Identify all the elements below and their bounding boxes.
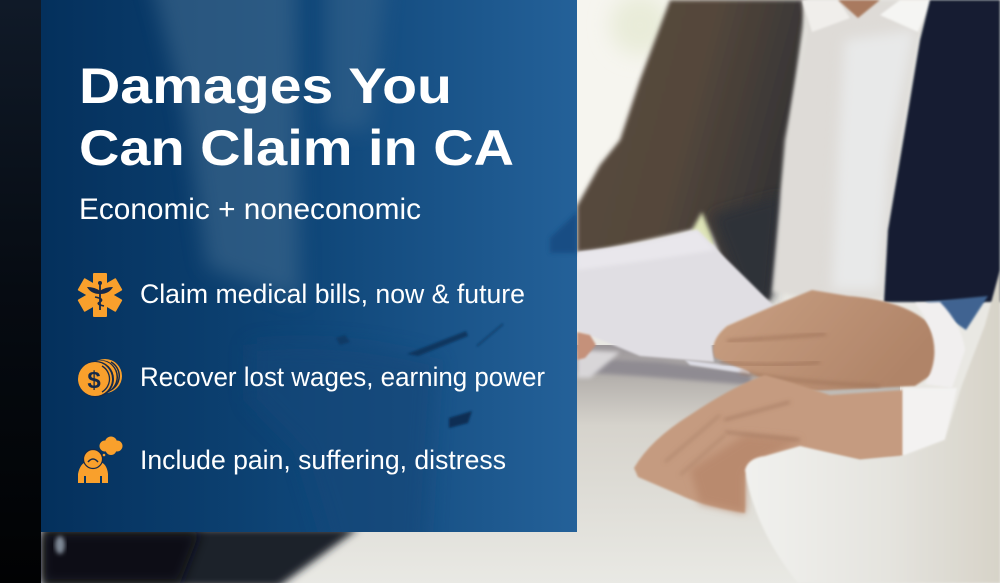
photo: dark lower jacket xyxy=(712,195,782,300)
photo: brown jacket xyxy=(577,0,806,300)
photo: navy suit jacket xyxy=(884,0,1000,302)
photo: dark strip at far left xyxy=(0,0,41,583)
panel photo: faint shapes showing through the panel xyxy=(148,0,577,560)
photo: bright window backdrop xyxy=(570,0,700,260)
icon: stack of coins with dollar sign: $ xyxy=(87,367,101,394)
photo: table surface xyxy=(300,345,900,583)
panel: translucent blue text panel xyxy=(41,0,577,560)
item: lost wages xyxy=(78,359,545,397)
photo: wrist under the hands xyxy=(690,435,800,513)
photo: lower clasped hands xyxy=(634,375,903,513)
photo: white shirt cuff xyxy=(915,302,965,388)
photo: green gap under the arm xyxy=(690,208,714,245)
photo: upper hand finger lines xyxy=(727,334,826,341)
photo: shirt front highlights xyxy=(832,30,915,290)
photo: white sleeve in foreground xyxy=(745,270,1000,583)
photo: dark foreground silhouette at left xyxy=(42,528,359,583)
photo: shadow under paper xyxy=(577,358,752,385)
photo: neck skin xyxy=(838,0,880,18)
item: medical bills xyxy=(77,273,525,317)
icon: sad person with thought bubble xyxy=(78,436,122,483)
heading: Damages You xyxy=(79,58,452,114)
photo: white shirt xyxy=(773,0,930,302)
text: pain and suffering: Include pain, suffering, distress xyxy=(140,445,506,475)
icon: medical star with caduceus xyxy=(77,273,123,317)
icon: stack of coins with dollar sign xyxy=(78,359,122,397)
text: lost wages: Recover lost wages, earning power xyxy=(140,362,545,392)
text: medical bills: Claim medical bills, now & future xyxy=(140,279,525,309)
item: pain and suffering xyxy=(78,436,506,483)
photo: sheet of paper xyxy=(577,230,774,362)
photo: second shirt cuff xyxy=(903,388,957,456)
heading xyxy=(79,58,514,176)
photo: upper hand holding paper xyxy=(713,290,939,392)
subheading: Economic + noneconomic xyxy=(79,193,421,226)
heading: Can Claim in CA xyxy=(79,120,514,176)
photo: lower hand finger lines xyxy=(724,402,800,440)
photo: blue sleeve xyxy=(925,296,988,330)
photo: left fingertip xyxy=(577,332,596,360)
